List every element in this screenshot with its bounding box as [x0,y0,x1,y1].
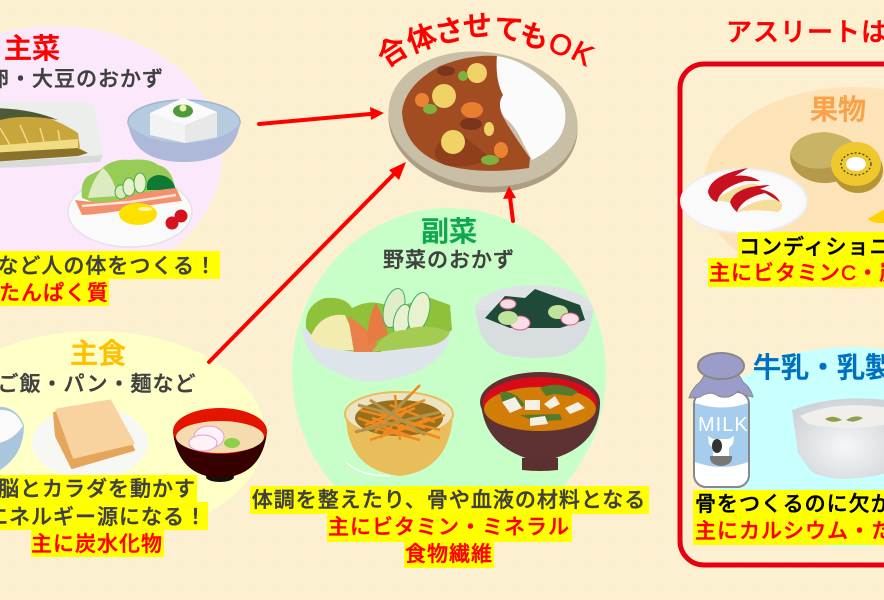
icon: udon bowl [173,408,267,482]
subheading: ご飯・パン・麺など: ご飯・パン・麺など [0,373,197,396]
icon: bacon and egg plate [68,160,192,247]
heading: 合体させてもOK: 体 [402,19,441,60]
text: エネルギー源 [0,475,208,557]
panel: 副菜 [250,208,649,568]
icon: yogurt bowl [792,398,884,479]
panel: athlete box [680,64,884,565]
heading: 合体させてもOK: も [516,18,552,56]
icon: salad bowl [302,286,452,382]
text: ビタミン・ミネラル [250,486,649,568]
text: 体をつくる [0,251,220,306]
heading: 合体させてもOK: さ [432,14,467,50]
arrow: 主菜 to curry [259,107,384,124]
heading: 果物: 果物 [810,94,866,125]
icon: milk bottle [689,353,753,487]
icon: curry rice plate [379,39,587,205]
text: カルシウム [693,490,884,545]
heading: 合体させてもOK: K [566,35,599,73]
heading: 主食: 主食 [70,338,126,369]
icon: kinpira bowl [345,385,453,476]
icon: rice bowl [0,407,24,472]
text: ビタミン・ミネラル: 主にビタミン・ミネラル [328,516,570,539]
icon: wakame salad bowl [475,285,593,358]
text: コンディショニング [708,232,884,287]
panel: 主菜 [0,26,240,306]
heading: 主菜: 主菜 [4,33,60,64]
icon: kiwi [788,130,883,193]
heading: 合体させてもOK: O [544,27,577,65]
icon: apple plate [681,168,807,233]
subheading: 野菜のおかず: 野菜のおかず [383,249,515,272]
heading: 合体させてもOK [372,10,599,74]
heading: 副菜: 副菜 [421,216,477,247]
icon: toast on plate [32,401,148,479]
icon: tofu bowl [128,98,240,162]
text: エネルギー源: 脳とカラダを動かす [0,478,196,501]
heading: 合体させてもOK: せ [462,10,493,44]
text: ビタミン・ミネラル: 食物繊維 [405,543,493,566]
arrow: 副菜 to curry [503,186,516,221]
panel: 果物 [681,87,884,289]
heading: 合体させてもOK: て [492,12,525,48]
text: エネルギー源: 主に炭水化物 [31,533,163,556]
icon: miso soup bowl [480,372,600,471]
icon: grilled mackerel [0,102,103,168]
heading: アスリートは: アスリートは [726,17,884,47]
icon: banana [868,206,884,223]
heading: 合体させてもOK: 合 [372,30,414,74]
panel: 主食 [0,331,267,557]
panel: 牛乳・乳製品 [689,347,884,547]
arrow: 主食 to curry [209,162,406,362]
text: ビタミン・ミネラル: 体調を整えたり、骨や血液の材料となる [252,489,646,512]
icon: milk bottle: MILK [698,414,749,436]
